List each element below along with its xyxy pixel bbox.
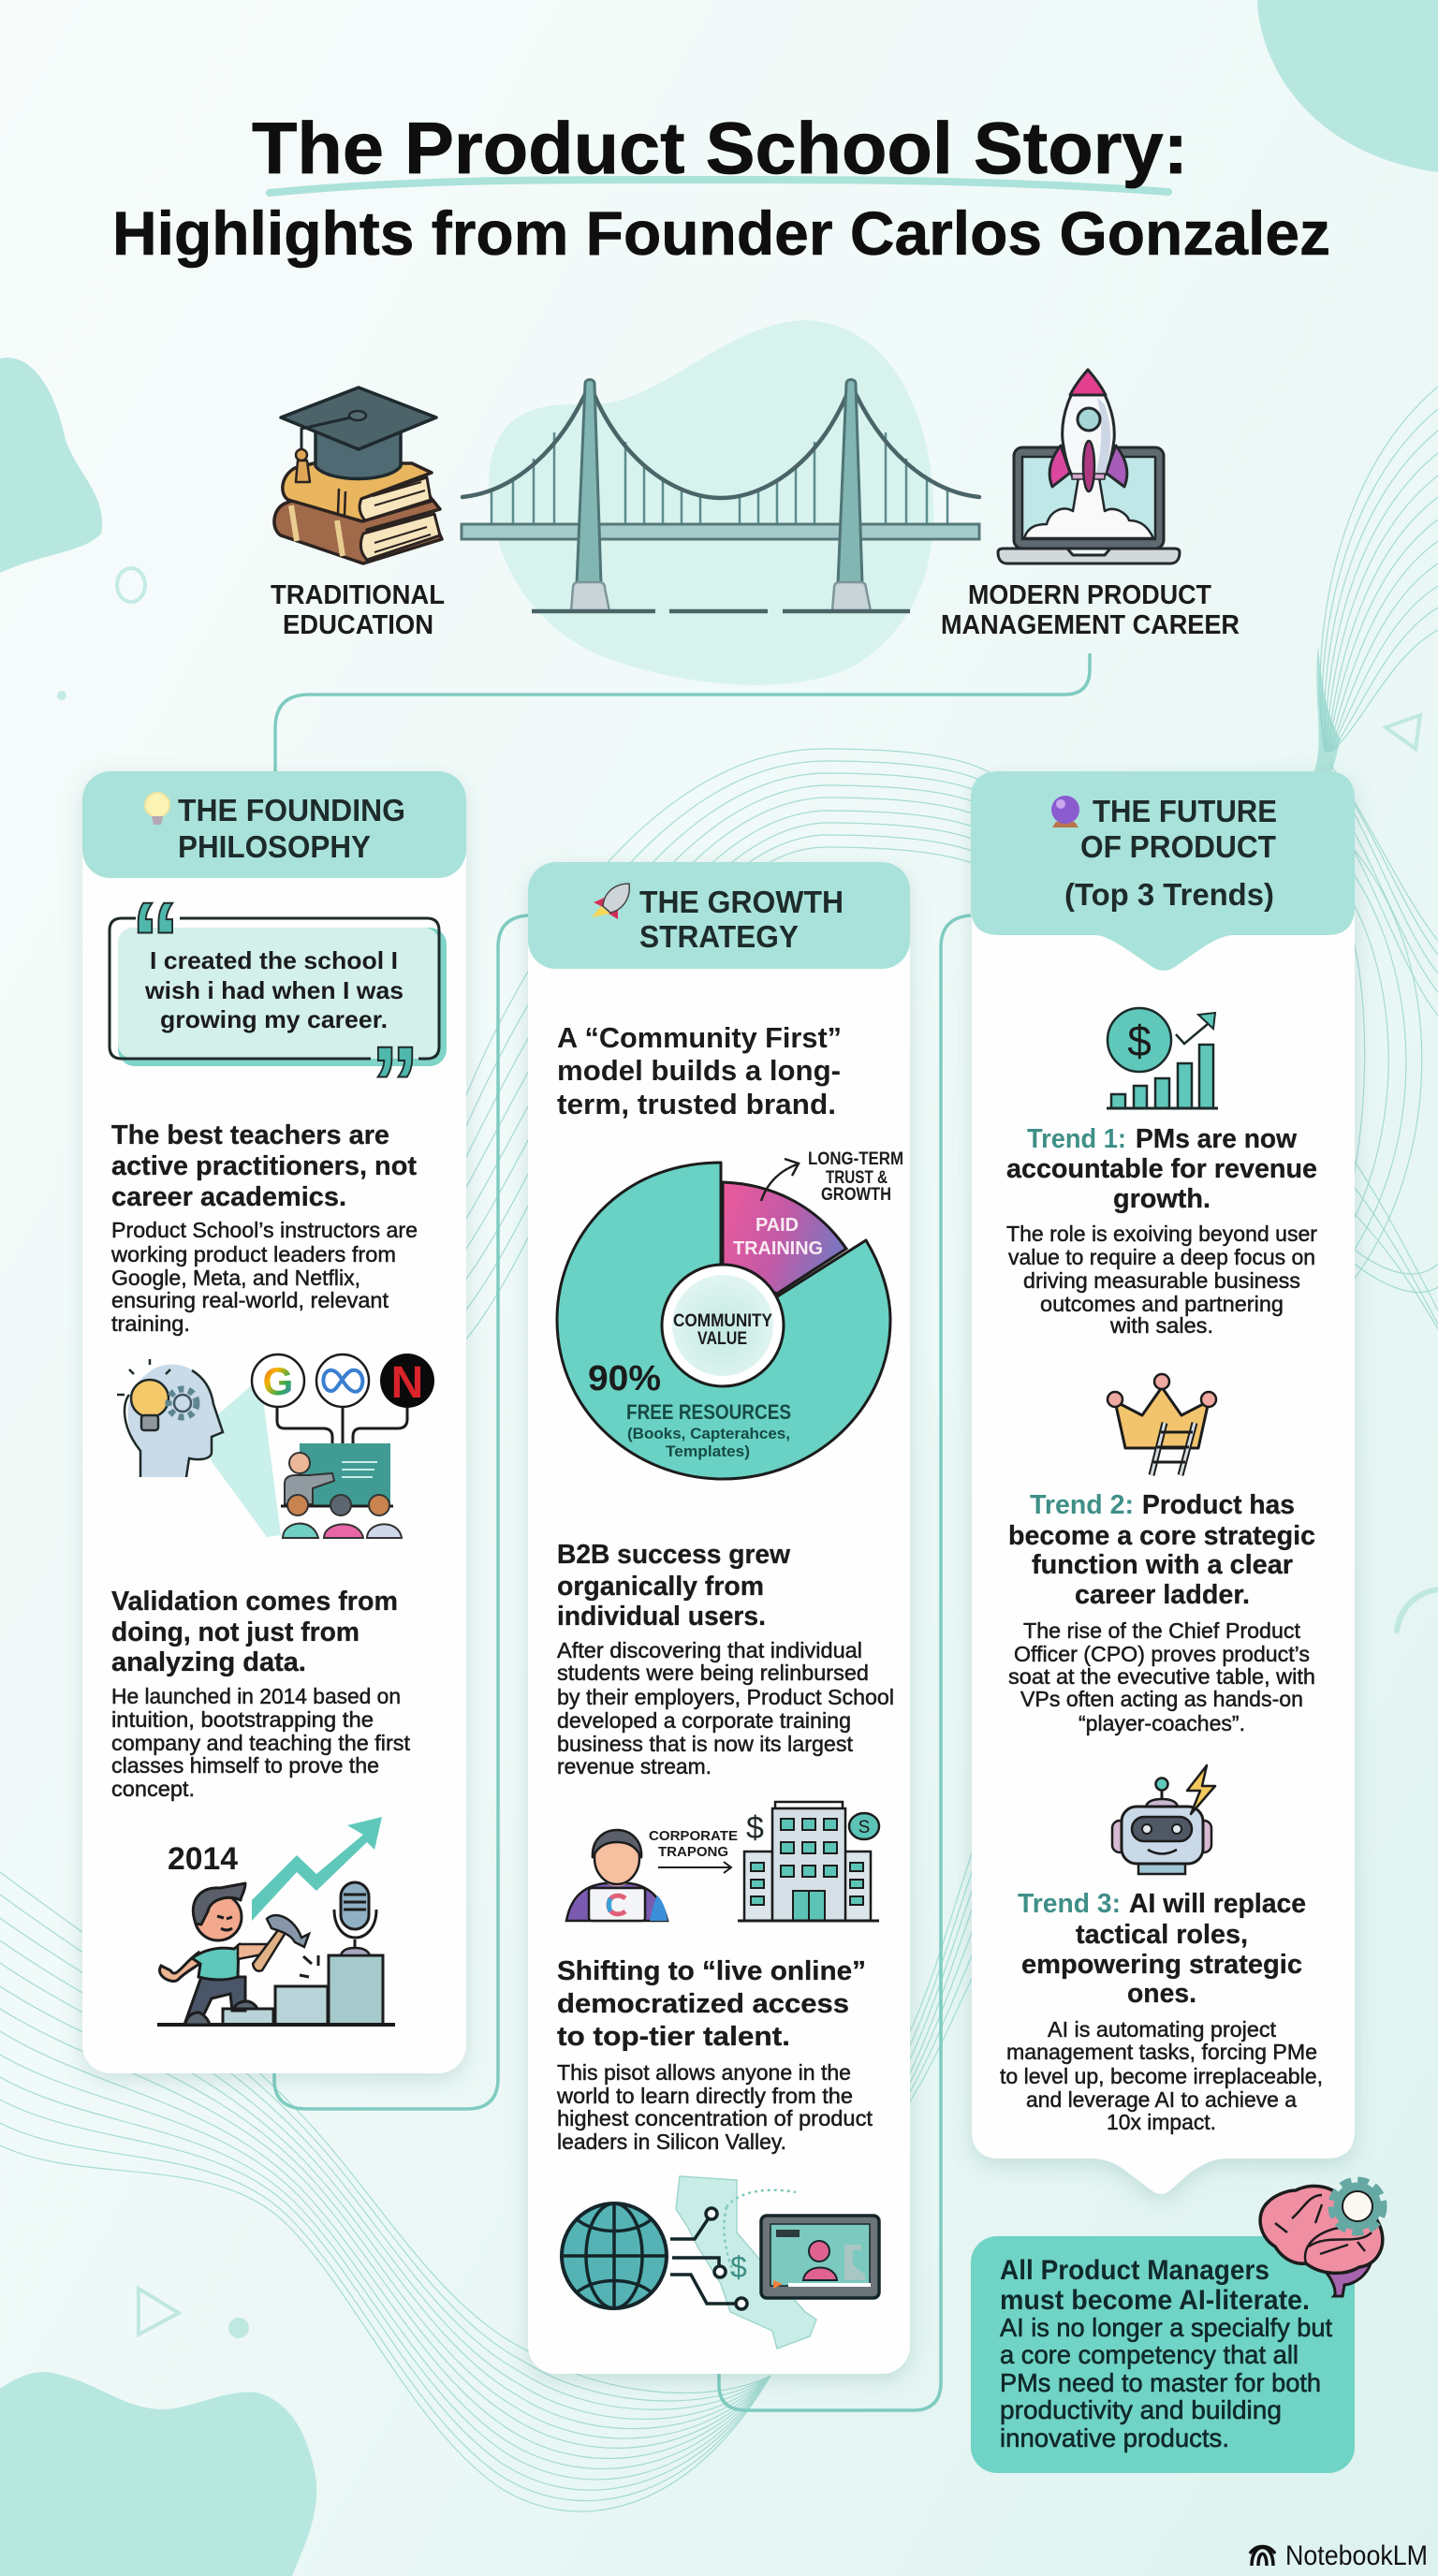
trend 3 heading: Trend 3: [1018, 1889, 1121, 1919]
panel: the founding philosophy [82, 771, 466, 2073]
icon: brain with gear [1260, 2182, 1383, 2296]
trend 3 heading: tactical roles, [1076, 1920, 1248, 1950]
heading: best teachers: The best teachers are [111, 1120, 389, 1150]
trend 3 heading: empowering strategic [1021, 1950, 1302, 1980]
heading: live online: democratized access [557, 1989, 849, 2019]
pie label: community value: COMMUNITY [673, 1311, 772, 1331]
quote box [110, 881, 447, 1142]
panel header [971, 771, 1355, 971]
heading: community first: model builds a long- [557, 1054, 841, 1087]
title underline [270, 180, 1168, 193]
body: corporate training: business that is now its largest [557, 1732, 854, 1756]
trend 2 body: The rise of the Chief Product [1023, 1618, 1301, 1643]
pie label: paid training: PAID [756, 1215, 799, 1236]
heading: community first: A “Community First” [557, 1021, 842, 1054]
callout heading: All Product Managers [1000, 2255, 1269, 2286]
icon: revenue growth chart [1107, 1008, 1218, 1108]
logo: Google: G [263, 1359, 293, 1403]
trend 3 body: 10x impact. [1107, 2110, 1216, 2134]
trend 2 heading: Trend 2: [1030, 1490, 1134, 1520]
pie label: 90 percent free resources [588, 1359, 791, 1460]
body: launch: concept. [111, 1777, 195, 1801]
heading: b2b success [557, 1540, 790, 1632]
connector: column two to column three [719, 915, 971, 2410]
trend 3 body: and leverage AI to achieve a [1026, 2087, 1297, 2112]
logo: Netflix [380, 1354, 434, 1408]
body: launch: intuition, bootstrapping the [111, 1707, 374, 1732]
trend 2 body: soat at the evecutive table, with [1008, 1664, 1315, 1689]
trend 2 body: VPs often acting as hands-on [1020, 1687, 1303, 1711]
callout heading: must become AI-literate. [1000, 2285, 1310, 2316]
label: traditional education [271, 580, 445, 640]
body: pivot: leaders in Silicon Valley. [557, 2130, 786, 2154]
quotation marks: “ [131, 881, 180, 998]
body: pivot: This pisot allows anyone in the [557, 2060, 851, 2085]
logo: Meta [316, 1354, 369, 1407]
label: traditional education: EDUCATION [283, 610, 433, 640]
panel header: THE FUTURE [1093, 794, 1277, 828]
heading: best teachers: career academics. [111, 1182, 346, 1212]
heading: live online: to top-tier talent. [557, 2022, 790, 2052]
illustration: student to corporate training [566, 1802, 879, 1921]
icon: rocket launching from laptop [998, 370, 1180, 564]
icon: graduation cap on books [274, 388, 442, 564]
trend 1 heading: Trend 1: [1027, 1124, 1126, 1154]
heading: b2b success: individual users. [557, 1602, 766, 1632]
title [112, 107, 1330, 268]
trend 3 body: AI is automating project [1048, 2017, 1277, 2042]
connector: column one to column two [274, 915, 528, 2109]
body: corporate training: by their employers, Product School [557, 1685, 894, 1709]
callout body: AI is no longer a specialfy but [1000, 2313, 1332, 2342]
pie label: 90 percent free resources: FREE RESOURCES [626, 1400, 791, 1424]
connector: header to column one [275, 653, 1090, 771]
callout: all product managers must become AI-literate [971, 2182, 1383, 2473]
panel header: STRATEGY [639, 919, 799, 954]
quote box: ” [371, 1025, 419, 1142]
trend 1 body: value to require a deep focus on [1008, 1245, 1315, 1269]
icon: rocket [592, 884, 629, 919]
logo: Google [252, 1354, 304, 1407]
panel header: (Top 3 Trends) [1064, 877, 1274, 912]
trend 2 heading: become a core strategic [1008, 1521, 1315, 1551]
trend 1 heading: PMs are now [1136, 1124, 1297, 1154]
pie label: community value [673, 1311, 772, 1349]
panel header [82, 771, 466, 878]
icon: bridge [462, 380, 979, 611]
body: instructors: training. [111, 1311, 190, 1336]
label: traditional education: TRADITIONAL [271, 580, 445, 610]
icon: robot with lightning bolt [1112, 1765, 1215, 1874]
heading: validation: doing, not just from [111, 1617, 360, 1647]
trend 2 body: Officer (CPO) proves product’s [1014, 1642, 1310, 1666]
panel header: THE FOUNDING [178, 793, 405, 827]
body: instructors: Google, Meta, and Netflix, [111, 1266, 360, 1290]
heading: best teachers [111, 1120, 417, 1212]
heading: community first: term, trusted brand. [557, 1088, 836, 1120]
callout heading [1000, 2255, 1310, 2316]
pie label: long-term trust and growth: GROWTH [821, 1185, 891, 1205]
trend 1 heading [1006, 1124, 1317, 1214]
trend 1 body: with sales. [1109, 1313, 1213, 1338]
icon: crown with ladder [1108, 1374, 1216, 1475]
trend 3 body: management tasks, forcing PMe [1006, 2040, 1317, 2064]
body: instructors [110, 1218, 418, 1336]
trend 2 heading: function with a clear [1032, 1550, 1293, 1580]
panel header [528, 862, 910, 969]
body: launch: He launched in 2014 based on [111, 1684, 401, 1708]
illustration: globe, silicon valley map and live video: $ [730, 2250, 747, 2284]
heading: best teachers: active practitioners, not [111, 1151, 417, 1181]
trend 3 body [1000, 2017, 1323, 2134]
title: The Product School Story: [252, 107, 1188, 189]
heading: community first [557, 1021, 842, 1120]
pie label: community value: VALUE [697, 1329, 747, 1349]
label: modern product management career: MODERN PRODUCT [968, 580, 1211, 610]
pie label: long-term trust and growth: TRUST & [826, 1168, 888, 1188]
illustration: student to corporate training: $ [746, 1810, 764, 1846]
illustration: founder building steps in 2014 [157, 1817, 395, 2025]
trend 1 body: driving measurable business [1023, 1268, 1300, 1293]
trend 3 body: to level up, become irreplaceable, [1000, 2064, 1323, 2088]
trend 1 body [1006, 1222, 1317, 1338]
pie label: 90 percent free resources: Templates) [666, 1442, 750, 1460]
body: launch [111, 1684, 411, 1801]
quote box: wish i had when I was [144, 976, 404, 1004]
body: launch: company and teaching the first [111, 1731, 411, 1755]
trend 1 heading: growth. [1113, 1184, 1211, 1214]
icon: light bulb [145, 793, 169, 825]
body: corporate training [557, 1638, 894, 1778]
heading: live online: Shifting to “live online” [557, 1956, 866, 1986]
pie label: paid training: TRAINING [733, 1238, 823, 1259]
callout body: innovative products. [1000, 2423, 1229, 2452]
illustration: globe, silicon valley map and live video [562, 2176, 879, 2349]
heading: validation: analyzing data. [111, 1647, 306, 1677]
illustration: student to corporate training: S [858, 1818, 870, 1837]
trend 2 heading [1008, 1490, 1315, 1610]
callout body: productivity and building [1000, 2395, 1282, 2424]
illustration: founder building steps in 2014: 2014 [168, 1841, 238, 1877]
trend 2 body [1008, 1618, 1315, 1735]
trend 2 heading: career ladder. [1075, 1580, 1250, 1610]
body: pivot [556, 2060, 873, 2154]
illustration: student to corporate training: CORPORATE [649, 1828, 738, 1844]
callout body: PMs need to master for both [1000, 2368, 1321, 2397]
illustration: student to corporate training: TRAPONG [658, 1844, 728, 1860]
quote box: I created the school I [150, 946, 398, 974]
pie label: paid training [733, 1215, 823, 1259]
body: corporate training: After discovering that individual [557, 1638, 862, 1662]
icon: revenue growth chart: $ [1127, 1017, 1152, 1065]
illustration: practitioners teaching [117, 1354, 434, 1538]
panel header: PHILOSOPHY [178, 829, 371, 864]
pie chart: free resources vs paid training [557, 1149, 903, 1479]
callout body [1000, 2313, 1332, 2452]
body: launch: classes himself to prove the [111, 1753, 379, 1778]
trend 1 body: outcomes and partnering [1040, 1292, 1284, 1316]
panel header: OF PRODUCT [1080, 829, 1276, 864]
body: corporate training: revenue stream. [557, 1754, 712, 1778]
pie label: 90 percent free resources: 90% [588, 1359, 661, 1398]
trend 1 heading: accountable for revenue [1006, 1154, 1317, 1184]
heading: validation [111, 1587, 398, 1677]
body: pivot: highest concentration of product [557, 2106, 873, 2130]
pie label: long-term trust and growth: LONG-TERM [808, 1149, 903, 1169]
body: instructors: ensuring real-world, relevant [111, 1288, 389, 1312]
callout body: a core competency that all [1000, 2340, 1299, 2369]
heading: validation: Validation comes from [111, 1587, 398, 1617]
trend 3 heading [1018, 1889, 1306, 2009]
body: corporate training: developed a corporate training [557, 1708, 851, 1733]
label: modern product management career [941, 580, 1240, 640]
trend 3 heading: AI will replace [1129, 1889, 1306, 1919]
body: pivot: world to learn directly from the [556, 2084, 853, 2108]
logo: Netflix: N [391, 1358, 423, 1408]
panel: the growth strategy [528, 862, 910, 2374]
quote box: growing my career. [160, 1005, 388, 1033]
pie label: long-term trust and growth [761, 1149, 903, 1205]
title: Highlights from Founder Carlos Gonzalez [112, 198, 1330, 268]
body: corporate training: students were being relinbursed [557, 1661, 869, 1685]
label: modern product management career: MANAGEMENT CAREER [941, 610, 1240, 640]
heading: b2b success: B2B success grew [557, 1540, 790, 1570]
panel header: THE GROWTH [639, 885, 844, 919]
trend 2 heading: Product has [1142, 1490, 1295, 1520]
heading: live online [557, 1956, 866, 2052]
trend 3 heading: ones. [1127, 1979, 1196, 2009]
body: instructors: Product School’s instructors are [111, 1218, 418, 1242]
pie label: 90 percent free resources: (Books, Capterahces, [627, 1425, 790, 1442]
body: instructors: working product leaders from [110, 1242, 396, 1266]
trend 2 body: “player-coaches”. [1078, 1711, 1245, 1735]
panel: the future of product [971, 771, 1355, 2194]
icon: crystal ball [1051, 796, 1079, 827]
heading: b2b success: organically from [557, 1572, 764, 1602]
trend 1 body: The role is exoiving beyond user [1006, 1222, 1317, 1246]
